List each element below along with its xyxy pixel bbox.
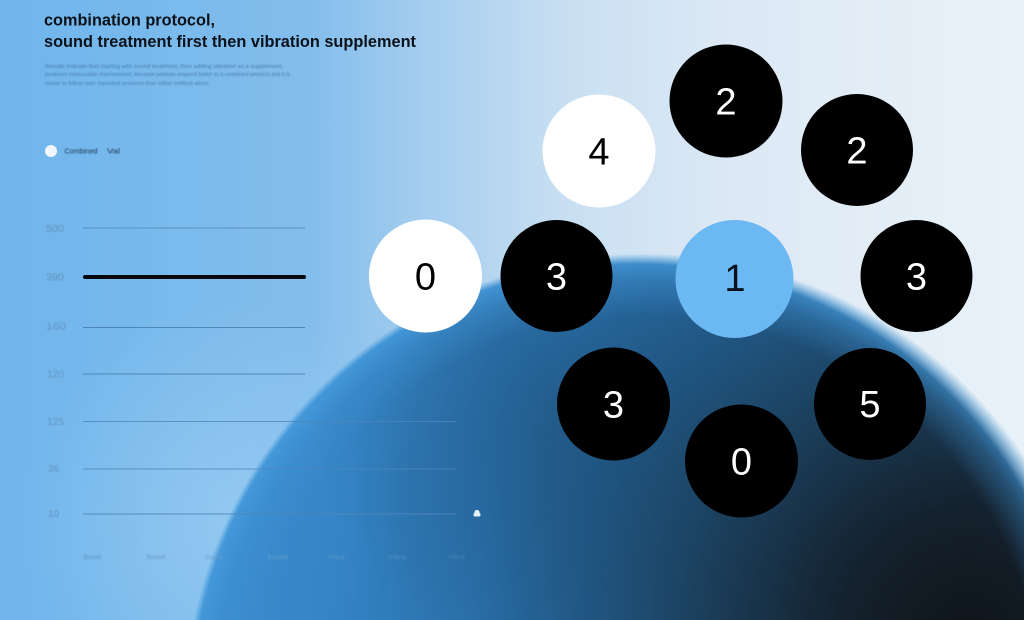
title: sound treatment first then vibration supplement bbox=[44, 32, 416, 51]
circle: 3 lower left bbox=[557, 348, 670, 460]
line chart bbox=[46, 224, 480, 561]
title bbox=[44, 10, 416, 51]
highlighted data line bbox=[85, 275, 304, 279]
circle: 1 centre blue: 1 bbox=[724, 258, 746, 300]
circle: 0 bottom: 0 bbox=[731, 442, 752, 484]
end marker bbox=[474, 510, 480, 516]
circle: 0 white: 0 bbox=[415, 256, 436, 298]
circle: 3 lower left: 3 bbox=[603, 384, 624, 426]
circle: 5 lower right bbox=[814, 348, 926, 460]
x axis labels: Vibra bbox=[388, 554, 406, 561]
circle: 1 centre blue bbox=[676, 220, 794, 338]
x axis labels: Sound bbox=[83, 554, 101, 561]
title: combination protocol, bbox=[44, 10, 215, 30]
circle: 0 white bbox=[369, 220, 482, 332]
description text bbox=[45, 64, 290, 87]
circle: 4 white: 4 bbox=[588, 132, 610, 174]
y axis labels: 390 bbox=[46, 272, 64, 284]
description text: Results indicate that starting with sound treatment, then adding vibration as a supplement, bbox=[45, 64, 283, 70]
y axis labels: 120 bbox=[47, 370, 64, 380]
legend label: Val bbox=[107, 146, 120, 156]
y axis labels: 125 bbox=[47, 417, 64, 428]
description text: easier to follow over repeated sessions than either method alone. bbox=[45, 81, 210, 87]
y axis labels: 10 bbox=[48, 509, 60, 520]
number circles bbox=[369, 44, 972, 518]
circle: 3 left: 3 bbox=[546, 256, 567, 298]
x axis labels: Sound bbox=[146, 554, 165, 561]
circle: 4 white bbox=[542, 94, 656, 208]
x axis labels: Vibra bbox=[448, 554, 465, 561]
x axis labels: Sound bbox=[267, 554, 288, 561]
circle: 3 right bbox=[860, 220, 972, 332]
legend label: Combined bbox=[64, 146, 98, 156]
description text: produces measurable improvement, because patients respond better to a combined protocol and it is bbox=[45, 72, 290, 78]
y axis labels: 160 bbox=[46, 322, 67, 332]
x axis labels: Vibra bbox=[327, 554, 345, 561]
large blurred sphere bbox=[194, 254, 1024, 620]
x axis labels bbox=[83, 554, 465, 561]
x axis labels: Sound bbox=[205, 554, 222, 561]
legend label bbox=[64, 146, 120, 156]
circle: 2 right bbox=[801, 94, 913, 206]
legend bbox=[45, 145, 120, 157]
circle: 2 top bbox=[670, 44, 782, 158]
legend marker bbox=[45, 145, 57, 157]
y axis labels bbox=[46, 224, 67, 520]
circle: 3 left bbox=[500, 220, 612, 332]
circle: 2 right: 2 bbox=[846, 130, 868, 172]
y axis labels: 36 bbox=[48, 464, 60, 475]
circle: 2 top: 2 bbox=[715, 82, 737, 124]
circle: 0 bottom bbox=[685, 404, 798, 518]
y axis labels: 500 bbox=[46, 224, 64, 235]
circle: 3 right: 3 bbox=[906, 256, 927, 298]
grid lines bbox=[83, 228, 456, 514]
circle: 5 lower right: 5 bbox=[859, 384, 881, 426]
